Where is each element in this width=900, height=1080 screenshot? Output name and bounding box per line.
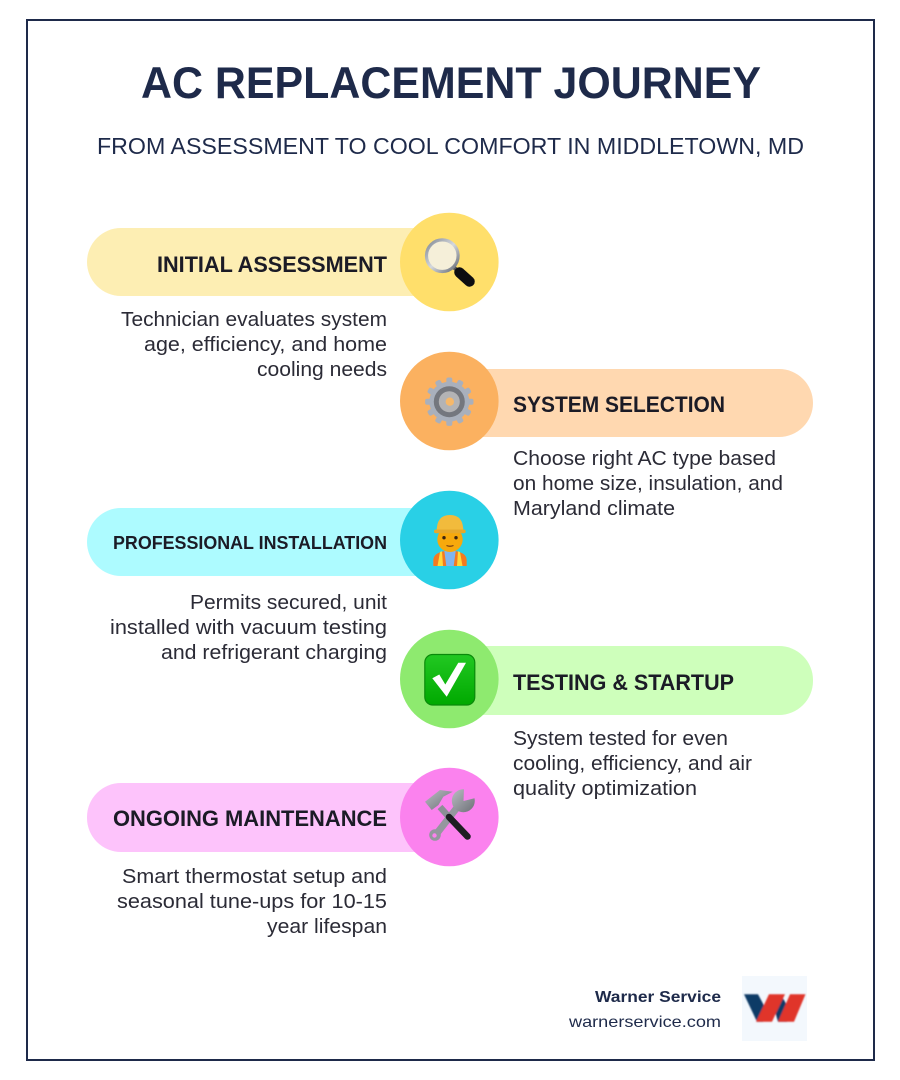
step 5: ongoing maintenance (87, 768, 499, 938)
step 2: system selection (400, 352, 813, 520)
step 4 label: TESTING & STARTUP (513, 670, 734, 695)
step 4 description: System tested for even (513, 728, 728, 750)
step 4 description (513, 728, 752, 800)
icon: gear (425, 378, 474, 426)
step 5 pill (87, 783, 457, 852)
logo (742, 976, 807, 1041)
step 4: testing and startup (400, 630, 813, 800)
step 1 description: age, efficiency, and home (144, 334, 387, 356)
step 1 label: INITIAL ASSESSMENT (157, 252, 388, 277)
step 3 description: Permits secured, unit (190, 592, 387, 614)
step 1 description (121, 309, 387, 381)
step 3 circle (400, 491, 499, 589)
step 3 pill (87, 508, 457, 576)
step 3: professional installation (87, 491, 499, 664)
step 5 description: year lifespan (267, 916, 387, 938)
step 3 label: PROFESSIONAL INSTALLATION (113, 533, 387, 553)
footer website: warnerservice.com (568, 1014, 721, 1031)
step 3 description (110, 592, 387, 664)
step 3 description: and refrigerant charging (161, 642, 387, 664)
step 4 description: cooling, efficiency, and air (513, 753, 752, 775)
title: AC REPLACEMENT JOURNEY (141, 59, 761, 108)
subtitle: FROM ASSESSMENT TO COOL COMFORT IN MIDDLETOWN, MD (97, 133, 804, 159)
step 5 circle (400, 768, 499, 866)
step 5 description: seasonal tune-ups for 10-15 (117, 891, 387, 913)
icon: check mark (425, 654, 475, 705)
step 1 description: cooling needs (257, 359, 387, 381)
step 5 description (117, 866, 387, 938)
step 4 description: quality optimization (513, 778, 697, 800)
icon: construction worker (433, 515, 467, 566)
footer brand name: Warner Service (595, 989, 721, 1006)
step 2 description: Choose right AC type based (513, 448, 776, 470)
step 2 description (513, 448, 783, 520)
step 2 pill (440, 369, 813, 437)
step 1 description: Technician evaluates system (121, 309, 387, 331)
step 1 pill (87, 228, 457, 296)
step 1: initial assessment (87, 213, 499, 381)
step 5 description: Smart thermostat setup and (122, 866, 387, 888)
step 2 circle (400, 352, 499, 450)
step 1 circle (400, 213, 499, 311)
icon: magnifying glass (426, 240, 470, 282)
icon: hammer and wrench (425, 788, 476, 841)
step 2 description: Maryland climate (513, 498, 675, 520)
step 3 description: installed with vacuum testing (110, 617, 387, 639)
step 2 description: on home size, insulation, and (513, 473, 783, 495)
step 2 label: SYSTEM SELECTION (513, 392, 725, 417)
step 4 circle (400, 630, 499, 728)
step 4 pill (440, 646, 813, 715)
step 5 label: ONGOING MAINTENANCE (113, 806, 387, 831)
